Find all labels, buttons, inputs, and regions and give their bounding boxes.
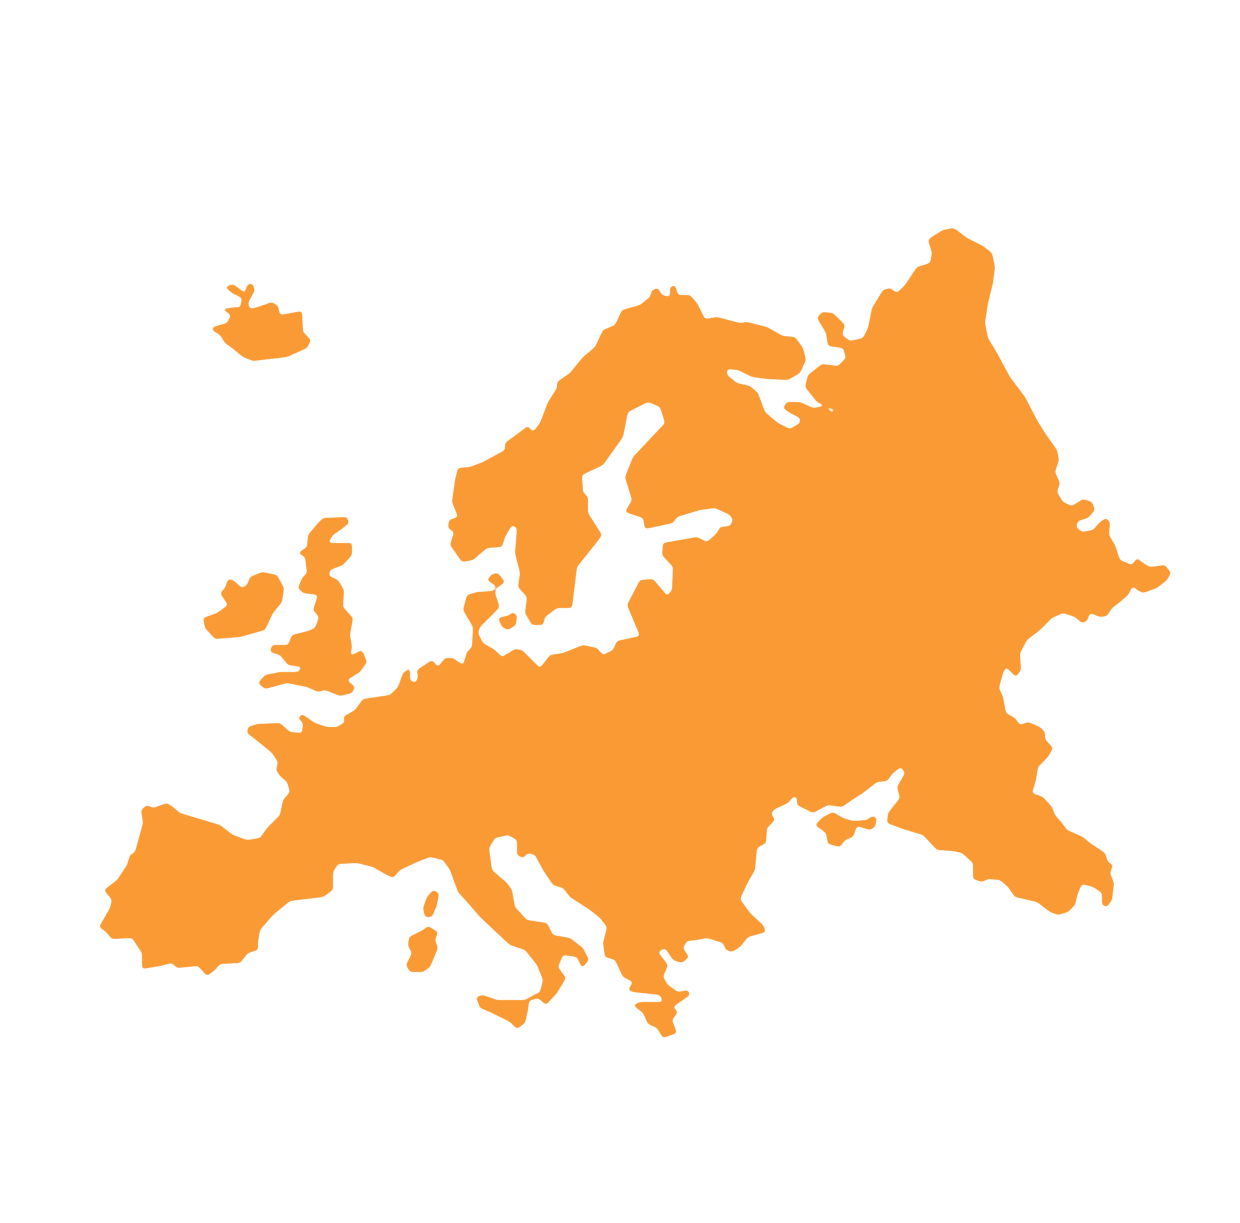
island: Crimea [815, 812, 877, 847]
island: Great Britain [258, 517, 367, 696]
island: Ireland [203, 572, 284, 639]
island: Corsica [423, 890, 439, 917]
island: Sardinia [406, 926, 438, 972]
landmass: continental Europe with Scandinavia, Italy and Greece [99, 228, 1171, 1038]
island: Iceland [212, 283, 311, 361]
island: Zealand [498, 612, 517, 630]
